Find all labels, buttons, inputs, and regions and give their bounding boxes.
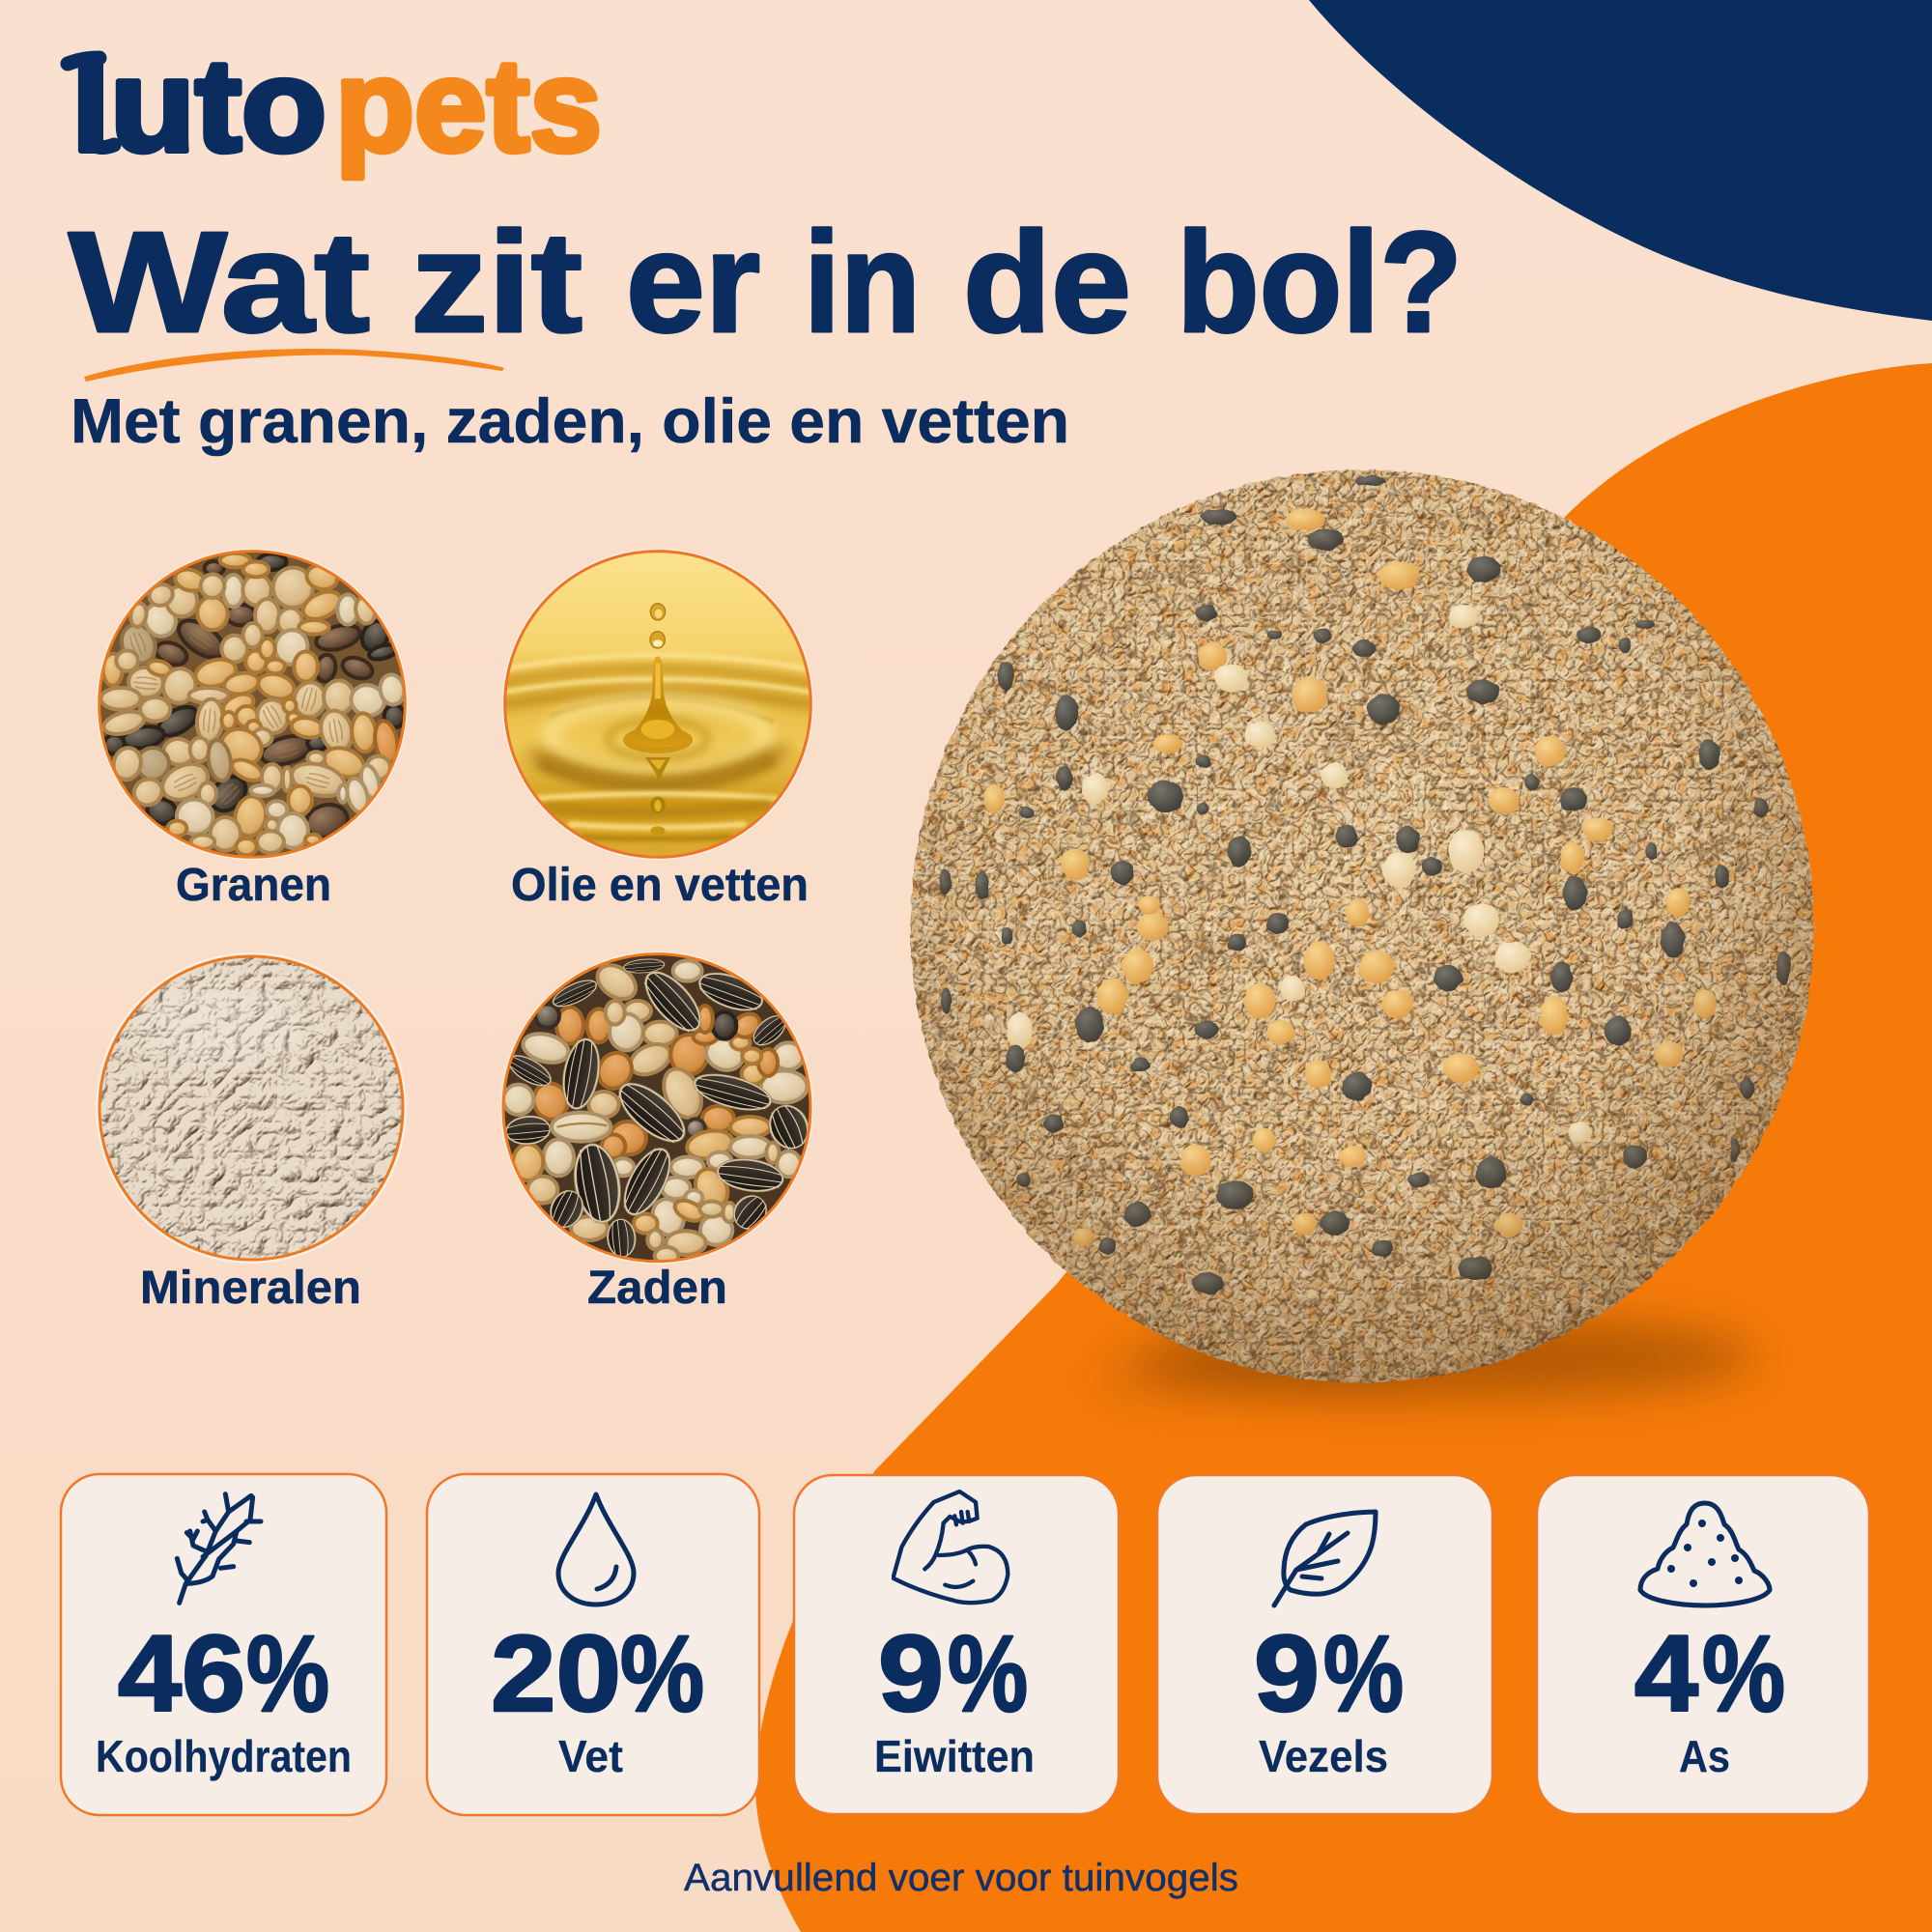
icon: flexed arm <box>894 1492 1008 1603</box>
stat card: vet <box>427 1474 759 1815</box>
value: 46%: 46 <box>118 1613 245 1734</box>
icon: grain branch <box>177 1494 261 1603</box>
value: 46% <box>118 1613 329 1734</box>
label: Eiwitten: Eiwitten <box>874 1731 1035 1781</box>
footer note: Aanvullend voer voor tuinvogels <box>684 1857 1238 1899</box>
value: 20% <box>491 1613 704 1734</box>
value: 9% <box>878 1613 1028 1734</box>
label: Koolhydraten: Koolhydraten <box>96 1731 352 1781</box>
title: Wat <box>69 203 370 362</box>
label: Granen: Granen <box>176 860 331 911</box>
title underline stroke <box>84 349 504 382</box>
ingredient: zaden <box>493 947 821 1314</box>
image: oil droplet circle <box>493 541 821 869</box>
title: de <box>963 203 1131 362</box>
logo: lutopets: luto <box>71 32 327 179</box>
subtitle: Met granen, zaden, olie en vetten <box>71 385 1069 456</box>
value: 4%: % <box>1702 1613 1785 1734</box>
image: mineral powder circle <box>96 952 407 1264</box>
ingredient: granen <box>87 541 415 911</box>
title: in <box>804 203 921 362</box>
title: er <box>626 203 760 362</box>
label: Olie en vetten: Olie en vetten <box>511 860 809 911</box>
value: 9%: % <box>948 1613 1028 1734</box>
value: 20%: % <box>620 1613 704 1734</box>
value: 20%: 20 <box>491 1613 621 1734</box>
label: Vet: Vet <box>558 1731 623 1781</box>
title: zit <box>411 203 582 362</box>
orange background shape <box>755 363 1932 1932</box>
icon: leaf <box>1274 1512 1376 1605</box>
icon: ash pile <box>1640 1503 1770 1605</box>
stat card: as <box>1537 1475 1869 1814</box>
ingredient: mineralen <box>96 952 407 1314</box>
icon: fat drop <box>558 1494 634 1605</box>
ingredient: olie en vetten <box>493 541 821 911</box>
value: 9%: % <box>1323 1613 1404 1734</box>
label: Zaden: Zaden <box>587 1263 727 1314</box>
value: 4%: 4 <box>1634 1613 1698 1734</box>
value: 9%: 9 <box>878 1613 944 1734</box>
value: 9% <box>1254 1613 1404 1734</box>
logo: lutopets <box>68 32 602 179</box>
label: Vezels: Vezels <box>1259 1731 1388 1781</box>
value: 46%: % <box>246 1613 329 1734</box>
logo: lutopets: pets <box>335 32 602 179</box>
value: 9%: 9 <box>1254 1613 1320 1734</box>
stat card: vezels <box>1157 1475 1492 1814</box>
image: seed mix circle <box>493 947 821 1275</box>
seed ball <box>898 454 1835 1391</box>
navy corner shape <box>1309 0 1932 321</box>
label: Mineralen: Mineralen <box>140 1263 361 1314</box>
image: grain mix circle <box>87 541 415 869</box>
stat card: koolhydraten <box>61 1474 386 1815</box>
value: 4% <box>1634 1613 1785 1734</box>
title <box>69 203 1463 362</box>
stat card: eiwitten <box>794 1475 1119 1814</box>
label: As: As <box>1679 1731 1730 1781</box>
title: bol? <box>1177 203 1463 362</box>
ball shadow <box>1092 1317 1758 1398</box>
